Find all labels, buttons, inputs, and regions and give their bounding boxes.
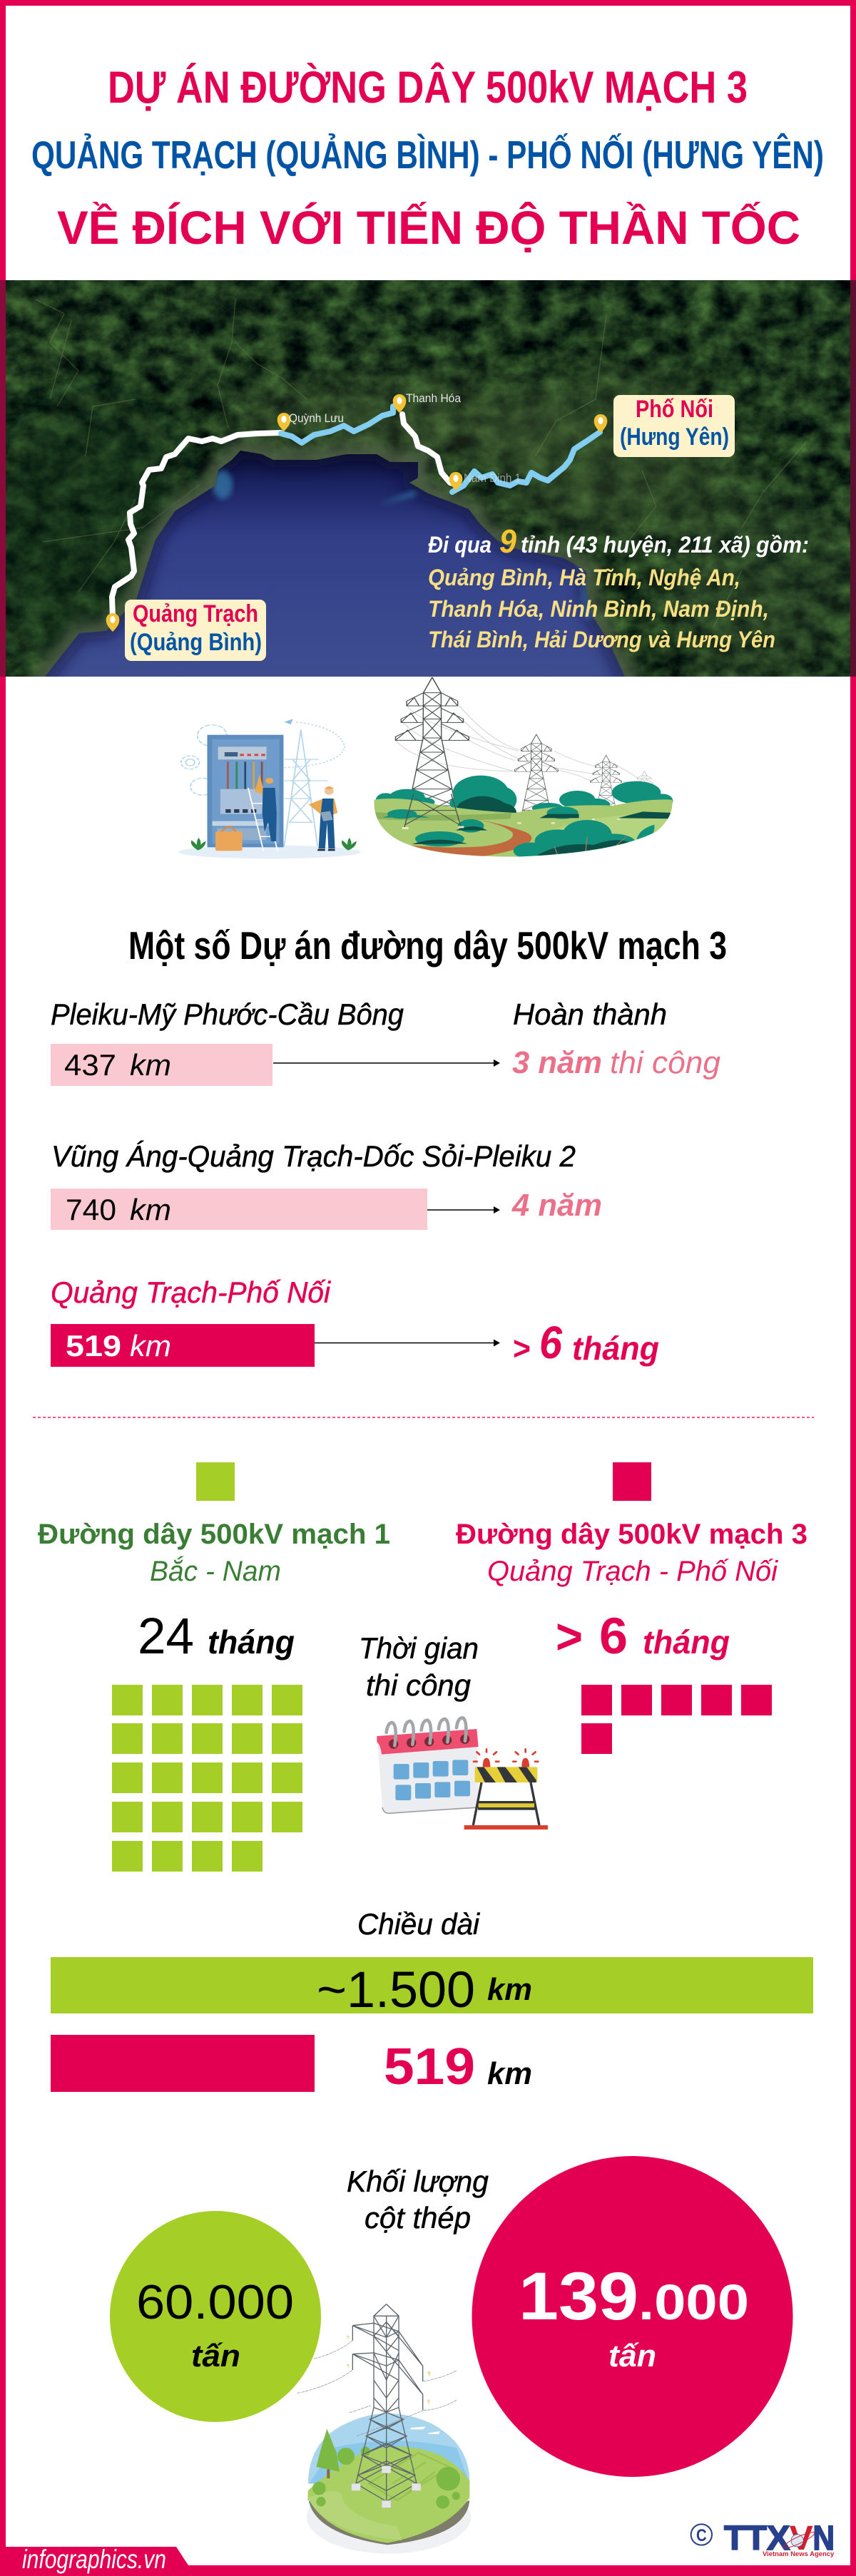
tree <box>316 2429 340 2478</box>
unit chart: 6 months <box>581 1685 772 1754</box>
stat: over 6 months <box>556 1608 730 1665</box>
duration: 4 năm <box>511 1188 602 1223</box>
comparison: line 3 header <box>456 1462 807 1587</box>
circle: 60.000 tons: tấn <box>191 2339 240 2374</box>
bar: 519 km: 519 <box>384 2038 475 2095</box>
bar 740 km: 740 <box>66 1193 116 1226</box>
duration: 3 năm <box>512 1045 602 1080</box>
comparison: line 3 header: Quảng Trạch - Phố Nối <box>487 1556 778 1587</box>
label: construction time: Thời gian <box>359 1631 479 1665</box>
stat: 24 months <box>138 1608 295 1665</box>
bar 740 km: km <box>130 1193 171 1226</box>
callout: Quảng Trạch: (Quảng Bình) <box>130 629 262 656</box>
logo: TTXVN: TTX <box>724 2520 790 2557</box>
bar 519 km: km <box>130 1329 171 1363</box>
sea <box>45 451 625 677</box>
comparison: line 1 header: Đường dây 500kV mạch 1 <box>38 1519 390 1550</box>
comparison: line 1 header <box>38 1462 390 1587</box>
back bushes <box>376 776 673 814</box>
duration: > <box>513 1330 531 1367</box>
stat: 24 months: 24 <box>138 1608 194 1665</box>
lattice <box>352 2304 423 2501</box>
road barrier <box>464 1749 548 1830</box>
duration: 6 <box>539 1317 562 1368</box>
map text: provinces: Đi qua <box>428 532 491 558</box>
project name: Quảng Trạch-Phố Nối <box>51 1276 332 1309</box>
bar 740 km <box>51 1189 427 1230</box>
arrow <box>315 1339 500 1346</box>
circle: 60.000 tons: 60.000 <box>136 2275 294 2329</box>
map text: provinces: Quảng Bình, Hà Tĩnh, Nghệ An, <box>428 565 740 590</box>
bar: 1500 km: km <box>487 1972 532 2007</box>
project row: Quảng Trạch-Phố Nối <box>51 1276 659 1368</box>
wires <box>297 2341 457 2436</box>
map text: provinces: tỉnh (43 huyện, 211 xã) gồm: <box>521 532 809 558</box>
callout: Quảng Trạch: Quảng Trạch <box>133 600 258 627</box>
project name: Vũng Áng-Quảng Trạch-Dốc Sỏi-Pleiku 2 <box>51 1139 576 1173</box>
map text: provinces: Thanh Hóa, Ninh Bình, Nam Định, <box>428 596 769 622</box>
route line <box>112 406 600 617</box>
project name: Pleiku-Mỹ Phước-Cầu Bông <box>51 997 404 1031</box>
callout: Phố Nối: (Hưng Yên) <box>620 424 729 451</box>
bar: 519 km <box>51 2035 532 2095</box>
logo: TTXVN: V <box>790 2520 813 2557</box>
map text: provinces: Thái Bình, Hải Dương và Hưng Yên <box>428 627 775 652</box>
bar 437 km: 437 <box>64 1048 116 1082</box>
heading: projects: Một số Dự án đường dây 500kV mạch 3 <box>128 923 727 968</box>
footer tab: infographics.vn <box>22 2545 166 2574</box>
icon: calendar and road barrier <box>377 1718 548 1830</box>
title line 1: DỰ ÁN ĐƯỜNG DÂY 500kV MẠCH 3 <box>108 62 748 113</box>
coastal plain <box>21 451 642 713</box>
logo: TTXVN <box>691 2520 835 2557</box>
circle: 139.000 tons: 139 <box>519 2259 638 2334</box>
label: construction time <box>359 1631 479 1702</box>
label: steel tower mass: cột thép <box>365 2201 471 2234</box>
project row: Vũng Áng-Quảng Trạch-Dốc Sỏi-Pleiku 2 <box>51 1139 602 1230</box>
map place names <box>289 391 521 485</box>
calendar <box>377 1718 479 1813</box>
label: construction time: thi công <box>366 1668 471 1702</box>
map place names: Quỳnh Lưu <box>289 411 344 425</box>
bar: 519 km: km <box>487 2056 532 2091</box>
label: steel tower mass: Khối lượng <box>347 2165 489 2198</box>
bar 519 km <box>51 1324 315 1367</box>
icon: steel tower on island <box>297 2304 471 2554</box>
worker with clipboard <box>309 786 337 851</box>
bushes <box>312 2447 460 2509</box>
stat: over 6 months: 6 <box>599 1608 628 1665</box>
illustration: power lines landscape <box>371 677 676 859</box>
duration <box>512 1045 721 1080</box>
circle: 139.000 tons: tấn <box>608 2339 656 2374</box>
column header: Hoàn thành <box>513 997 667 1031</box>
duration: thi công <box>610 1045 721 1080</box>
stat: over 6 months: > <box>556 1608 583 1664</box>
title <box>31 62 824 254</box>
callout: Phố Nối <box>613 395 735 457</box>
globe <box>782 2530 816 2550</box>
copyright mark: C <box>696 2526 707 2545</box>
bar 437 km <box>51 1044 272 1086</box>
illustration: engineers at electrical cabinet <box>178 719 360 858</box>
bar 437 km: km <box>130 1048 171 1082</box>
project row: Pleiku-Mỹ Phước-Cầu Bông <box>51 997 721 1086</box>
circle: 139.000 tons <box>472 2156 793 2477</box>
plants <box>191 838 357 851</box>
circle: 139.000 tons: .000 <box>638 2274 749 2330</box>
stat: 24 months: tháng <box>208 1623 295 1661</box>
bar: 1500 km <box>51 1957 813 2018</box>
copyright mark <box>691 2524 712 2545</box>
footer tab <box>0 2545 856 2576</box>
map text: provinces: 9 <box>499 523 516 560</box>
footings <box>352 2466 421 2508</box>
sparks <box>346 2335 431 2405</box>
callout: Phố Nối: Phố Nối <box>636 396 713 423</box>
legend square pink <box>613 1462 651 1501</box>
label: length: Chiều dài <box>357 1907 481 1941</box>
logo: TTXVN: N <box>812 2520 835 2557</box>
map text: provinces <box>428 523 809 652</box>
map pins <box>106 394 607 632</box>
comparison: line 3 header: Đường dây 500kV mạch 3 <box>456 1519 807 1550</box>
bar: 1500 km: ~1.500 <box>317 1962 475 2018</box>
unit chart: 24 months <box>112 1685 302 1872</box>
duration <box>513 1317 659 1368</box>
worker on ladder <box>255 775 277 841</box>
duration: tháng <box>572 1330 659 1367</box>
logo: TTXVN: Vietnam News Agency <box>763 2550 834 2557</box>
bar 519 km: 519 <box>66 1329 121 1363</box>
title line 3: VỀ ĐÍCH VỚI TIẾN ĐỘ THẦN TỐC <box>57 201 800 254</box>
panel: satellite map <box>0 280 850 713</box>
label: steel tower mass <box>347 2165 489 2234</box>
map place names: Nam Định 1 <box>464 471 521 485</box>
map place names: Thanh Hóa <box>406 391 461 405</box>
callout: Quảng Trạch <box>125 600 266 661</box>
stat: over 6 months: tháng <box>643 1623 730 1661</box>
arrow <box>273 1059 500 1067</box>
arrow <box>427 1206 500 1213</box>
circle: 60.000 tons <box>110 2211 321 2422</box>
legend square green <box>196 1462 235 1501</box>
comparison: line 1 header: Bắc - Nam <box>150 1555 281 1587</box>
